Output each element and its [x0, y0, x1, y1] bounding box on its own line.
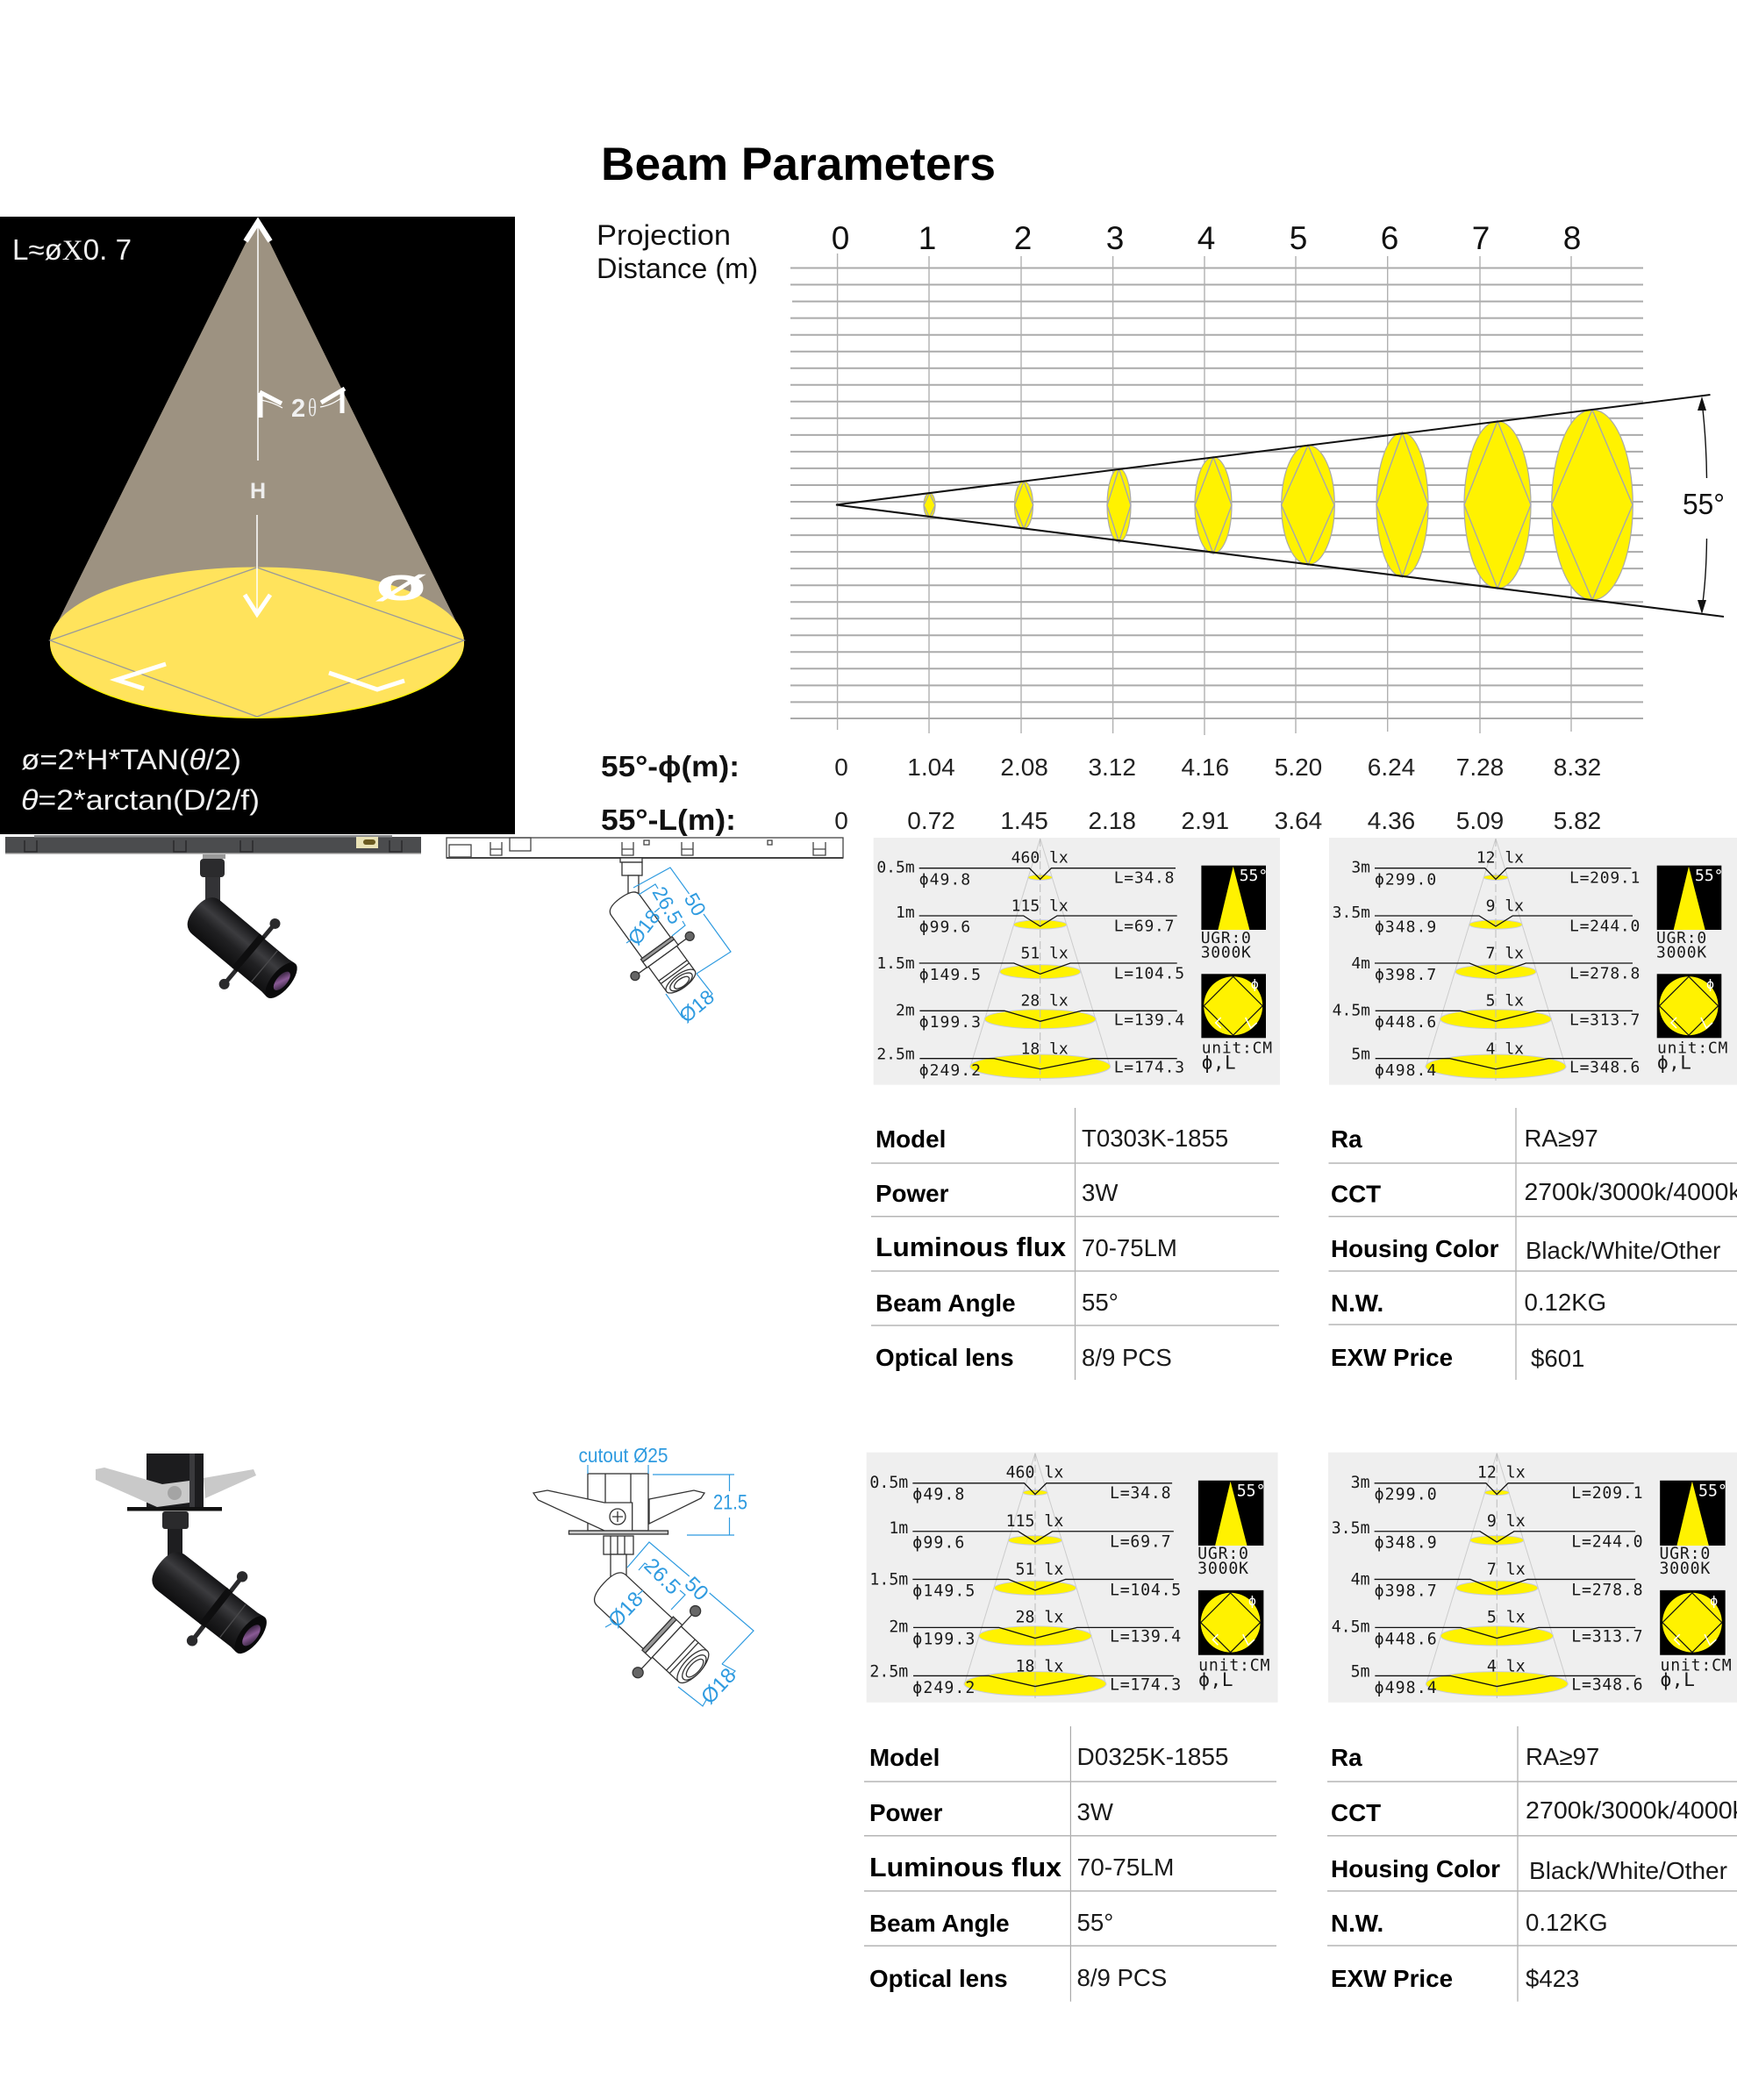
- readings: 1m: [889, 1519, 908, 1538]
- readings: ϕ99.6: [912, 1534, 965, 1553]
- distance numbers: 7: [1472, 220, 1490, 256]
- dimension: 26.5: 26.5: [640, 1554, 685, 1599]
- text: units: unit:CM: [1202, 1039, 1273, 1058]
- row labels: CCT: [1331, 1799, 1381, 1826]
- readings: ϕ149.5: [912, 1582, 976, 1601]
- distance numbers: 6: [1381, 220, 1398, 256]
- flange and stem: [127, 1507, 222, 1557]
- readings: ϕ299.0: [1375, 870, 1437, 889]
- row labels: [1331, 1744, 1500, 1992]
- readings: L=348.6: [1571, 1676, 1643, 1695]
- spread cone: [964, 1454, 1106, 1685]
- readings: 9 lx: [1486, 896, 1524, 915]
- distance numbers: 0: [832, 220, 849, 256]
- readings: 18 lx: [1016, 1657, 1063, 1675]
- row labels: [1331, 1125, 1499, 1371]
- readings: 1m: [896, 904, 915, 922]
- readings: L=174.3: [1114, 1059, 1185, 1077]
- beam spots and levels: [1375, 839, 1633, 1081]
- row values: 2700k/3000k/4000k: [1526, 1796, 1737, 1824]
- readings: 3.5m: [1333, 904, 1370, 922]
- readings: 4m: [1351, 1570, 1370, 1589]
- chart: beam projection grid: [790, 220, 1725, 735]
- text: units: [1198, 1656, 1270, 1691]
- readings: ϕ498.4: [1375, 1061, 1437, 1080]
- row: diameter values: 8.32: [1554, 754, 1601, 781]
- beam data panel: 0.5m to 2.5m, model T0303K: [874, 838, 1280, 1085]
- readings: 5 lx: [1486, 992, 1524, 1011]
- text: units: ϕ,L: [1202, 1052, 1236, 1073]
- product photo: track spotlight: [5, 835, 421, 1021]
- readings: ϕ299.0: [1375, 1486, 1438, 1504]
- row: side length values: 2.18: [1088, 807, 1136, 834]
- readings: ϕ249.2: [919, 1061, 982, 1080]
- text: units: [1660, 1656, 1733, 1691]
- readings: L=139.4: [1110, 1628, 1182, 1646]
- readings: 4 lx: [1486, 1040, 1524, 1059]
- icon: spot shape: [1198, 1590, 1263, 1655]
- readings: 4.5m: [1333, 1001, 1370, 1019]
- readings: ϕ448.6: [1375, 1630, 1438, 1648]
- text: glare and CCT: 3000K: [1659, 1560, 1711, 1578]
- label: diameter symbol: ø: [375, 558, 426, 611]
- readings: 3.5m: [1332, 1519, 1370, 1538]
- row: diameter values: 5.20: [1275, 754, 1322, 781]
- distance numbers: 1: [919, 220, 936, 256]
- readings: 2m: [889, 1618, 908, 1636]
- readings: L=34.8: [1114, 869, 1175, 888]
- panel: beam cone formula diagram: [0, 217, 515, 834]
- text: glare and CCT: [1659, 1545, 1711, 1578]
- row labels: Ra: [1331, 1125, 1362, 1153]
- row: diameter values: 0: [834, 754, 848, 781]
- technical drawing: recessed spotlight: [533, 1444, 754, 1709]
- row: side length values: 0.72: [907, 807, 955, 834]
- row values: RA≥97: [1526, 1743, 1599, 1770]
- readings: 51 lx: [1016, 1561, 1063, 1579]
- row labels: Housing Color: [1331, 1235, 1499, 1262]
- icon: beam angle: [1201, 866, 1268, 930]
- readings: 51 lx: [1021, 945, 1069, 963]
- icon: spot shape: ϕ: [1706, 976, 1714, 992]
- readings: L=313.7: [1571, 1628, 1643, 1646]
- readings: L=104.5: [1114, 965, 1185, 983]
- row: side length values: 1.45: [1000, 807, 1048, 834]
- readings: 2.5m: [876, 1046, 915, 1064]
- angle label: 2 theta: θ: [308, 395, 317, 422]
- readings: 7 lx: [1486, 945, 1524, 963]
- axis label: projection distance: Distance (m): [597, 253, 758, 284]
- readings: 115 lx: [1011, 896, 1069, 915]
- label: L marks: [117, 664, 404, 689]
- readings: ϕ149.5: [919, 966, 982, 984]
- label: H: H: [250, 479, 266, 504]
- row: side length values: 4.36: [1368, 807, 1415, 834]
- text: glare and CCT: 3000K: [1656, 944, 1707, 962]
- readings: 5m: [1351, 1046, 1370, 1064]
- icon: spot shape: ϕ: [1251, 976, 1259, 992]
- readings: [876, 848, 1185, 1080]
- row values: [1525, 1125, 1737, 1372]
- dimension: 26.5: 26.5: [648, 882, 687, 928]
- row values: 55°: [1077, 1909, 1113, 1936]
- readings: L=244.0: [1569, 918, 1640, 936]
- row: diameter values: 3.12: [1088, 754, 1136, 781]
- row labels: Optical lens: [876, 1344, 1014, 1371]
- row labels: [876, 1125, 1067, 1371]
- readings: L=348.6: [1569, 1059, 1640, 1077]
- row values: 3W: [1082, 1179, 1118, 1206]
- axis label: projection distance: Projection: [597, 219, 731, 251]
- readings: ϕ398.7: [1375, 1582, 1438, 1601]
- text: glare and CCT: [1197, 1545, 1249, 1578]
- row labels: N.W.: [1331, 1289, 1383, 1317]
- track outline: [447, 838, 843, 858]
- beam data panel: 3m to 5m, model D0325K: [1328, 1453, 1737, 1703]
- row: diameter values: 55°-ϕ(m):: [601, 750, 740, 782]
- readings: ϕ199.3: [919, 1013, 982, 1032]
- icon: spot shape: ϕ: [1710, 1593, 1718, 1609]
- beam spots and levels: [919, 839, 1177, 1081]
- readings: ϕ448.6: [1375, 1013, 1437, 1032]
- dimension: 50: 50: [680, 889, 711, 920]
- row values: Black/White/Other: [1526, 1237, 1720, 1264]
- readings: ϕ348.9: [1375, 1534, 1438, 1553]
- row: side length values: 2.91: [1182, 807, 1229, 834]
- lamp body: [131, 1527, 287, 1677]
- readings: ϕ99.6: [919, 918, 971, 937]
- row: diameter values: 7.28: [1456, 754, 1504, 781]
- distance numbers: 2: [1014, 220, 1032, 256]
- icon: beam angle: 55°: [1240, 867, 1268, 885]
- row labels: Luminous flux: [876, 1232, 1067, 1262]
- dimension: height 21.5: 21.5: [713, 1491, 747, 1514]
- dimension: front diameter 18: [666, 974, 718, 1027]
- readings: 7 lx: [1487, 1561, 1526, 1579]
- readings: 5m: [1351, 1662, 1370, 1681]
- distance numbers: 3: [1106, 220, 1124, 256]
- readings: 3m: [1351, 1474, 1370, 1492]
- icon: beam angle: 55°: [1698, 1482, 1727, 1500]
- beam spots and levels: [1375, 1454, 1635, 1698]
- readings: 4 lx: [1487, 1657, 1526, 1675]
- row labels: EXW Price: [1331, 1965, 1453, 1992]
- row: side length values: [601, 804, 1601, 836]
- text: units: [1202, 1039, 1273, 1073]
- row: side length values: 55°-L(m):: [601, 804, 736, 836]
- readings: 2.5m: [869, 1662, 908, 1681]
- row values: 70-75LM: [1082, 1234, 1177, 1261]
- distance numbers: 8: [1563, 220, 1581, 256]
- readings: L=69.7: [1114, 918, 1175, 936]
- row labels: Model: [876, 1125, 946, 1153]
- row: diameter values: 2.08: [1000, 754, 1048, 781]
- spread cone: [1426, 839, 1566, 1068]
- row values: $601: [1531, 1345, 1584, 1372]
- readings: 1.5m: [876, 954, 915, 973]
- row values: 8/9 PCS: [1077, 1964, 1167, 1991]
- text: glare and CCT: [1201, 929, 1252, 962]
- row labels: Luminous flux: [869, 1852, 1062, 1882]
- row labels: Power: [869, 1799, 943, 1826]
- readings: ϕ199.3: [912, 1630, 976, 1648]
- readings: 12 lx: [1477, 1463, 1526, 1482]
- readings: 2m: [896, 1001, 915, 1019]
- beam edges: [836, 395, 1724, 617]
- icon: spot shape: ϕ: [1248, 1593, 1256, 1609]
- beam data panel: 0.5m to 2.5m, model D0325K: [867, 1453, 1278, 1703]
- readings: 460 lx: [1011, 848, 1069, 867]
- icon: spot shape: [1201, 974, 1266, 1038]
- readings: 3m: [1351, 859, 1370, 877]
- angle dimension: 55 degrees: 55°: [1683, 488, 1725, 520]
- product photo: recessed spotlight: [96, 1454, 287, 1677]
- readings: ϕ249.2: [912, 1679, 976, 1697]
- angle dimension: 55 degrees: [1683, 396, 1725, 614]
- grid horizontal lines: [790, 268, 1643, 718]
- row values: 3W: [1077, 1798, 1113, 1825]
- row: diameter values: 1.04: [907, 754, 955, 781]
- row values: 8/9 PCS: [1082, 1344, 1172, 1371]
- text: units: unit:CM: [1198, 1656, 1270, 1675]
- icon: beam angle: [1198, 1481, 1266, 1546]
- readings: L=209.1: [1571, 1484, 1643, 1503]
- text: glare and CCT: 3000K: [1201, 944, 1252, 962]
- readings: [1332, 1463, 1643, 1697]
- spec table: D0325K left: [864, 1726, 1276, 2002]
- readings: L=69.7: [1110, 1533, 1171, 1552]
- icon: beam angle: 55°: [1695, 867, 1724, 885]
- row values: Black/White/Other: [1529, 1857, 1727, 1884]
- formula: L approx: L≈øX0. 7: [12, 233, 132, 267]
- row values: D0325K-1855: [1077, 1743, 1228, 1770]
- text: units: ϕ,L: [1660, 1669, 1695, 1691]
- text: units: ϕ,L: [1198, 1669, 1233, 1691]
- icon: spot shape: [1657, 974, 1721, 1038]
- beam spots: [924, 410, 1633, 600]
- row values: [1526, 1743, 1737, 1992]
- readings: 5 lx: [1487, 1609, 1526, 1627]
- stem: [200, 854, 225, 904]
- lamp body: [167, 874, 318, 1021]
- readings: L=278.8: [1569, 965, 1640, 983]
- dimension: height 21.5: [588, 1465, 747, 1535]
- readings: 0.5m: [876, 859, 915, 877]
- row values: T0303K-1855: [1082, 1125, 1228, 1152]
- title: Beam Parameters: [601, 139, 996, 190]
- row values: 0.12KG: [1526, 1909, 1608, 1936]
- outline lamp: [571, 1548, 732, 1707]
- row labels: Ra: [1331, 1744, 1362, 1771]
- row labels: CCT: [1331, 1181, 1381, 1207]
- dimension: front diameter 18: Ø18: [675, 985, 718, 1027]
- readings: ϕ49.8: [919, 870, 971, 889]
- spec table: T0303K left: [871, 1108, 1279, 1380]
- text: glare and CCT: [1656, 929, 1707, 962]
- row values: RA≥97: [1525, 1125, 1598, 1152]
- dimension: front diameter 18: Ø18: [697, 1664, 741, 1709]
- readings: [1333, 848, 1640, 1080]
- outline stem: [620, 858, 642, 896]
- row: diameter values: 6.24: [1368, 754, 1415, 781]
- spec table: T0303K right: [1328, 1108, 1737, 1380]
- text: glare and CCT: 3000K: [1197, 1560, 1249, 1578]
- text: units: unit:CM: [1657, 1039, 1728, 1058]
- grid vertical lines: [838, 254, 1571, 735]
- arrow: height axis: [245, 221, 270, 614]
- dimension: 50: [633, 868, 731, 974]
- dimension: body diameter 18: Ø18: [623, 905, 665, 949]
- readings: 12 lx: [1476, 848, 1524, 867]
- dimension: body diameter 18: Ø18: [604, 1588, 648, 1632]
- row labels: Model: [869, 1744, 940, 1771]
- text: glare and CCT: UGR:0: [1201, 929, 1252, 947]
- row labels: Optical lens: [869, 1965, 1008, 1992]
- readings: L=34.8: [1110, 1484, 1171, 1503]
- readings: [869, 1463, 1182, 1697]
- text: glare and CCT: UGR:0: [1656, 929, 1707, 947]
- formula: angle: θ=2*arctan(D/2/f): [21, 784, 260, 816]
- row labels: [869, 1744, 1062, 1992]
- readings: ϕ398.7: [1375, 966, 1437, 984]
- spec table: D0325K right: [1327, 1726, 1737, 2002]
- readings: L=244.0: [1571, 1533, 1643, 1552]
- distance numbers: 5: [1290, 220, 1307, 256]
- row values: 55°: [1082, 1289, 1119, 1316]
- row: side length values: 3.64: [1275, 807, 1322, 834]
- text: units: ϕ,L: [1657, 1052, 1691, 1073]
- row: diameter values: 4.16: [1182, 754, 1229, 781]
- readings: 115 lx: [1006, 1512, 1063, 1531]
- readings: 28 lx: [1016, 1609, 1063, 1627]
- text: glare and CCT: UGR:0: [1197, 1545, 1249, 1563]
- readings: L=313.7: [1569, 1011, 1640, 1029]
- dimension: 26.5: [639, 882, 687, 936]
- readings: 1.5m: [869, 1570, 908, 1589]
- spread cone: [970, 839, 1111, 1068]
- readings: 28 lx: [1021, 992, 1069, 1011]
- row values: [1082, 1125, 1228, 1371]
- technical drawing: track spotlight: [447, 838, 843, 1027]
- text: units: [1657, 1039, 1728, 1073]
- row values: 70-75LM: [1077, 1854, 1174, 1881]
- readings: 4.5m: [1332, 1618, 1370, 1636]
- dimension: 50: [627, 1542, 754, 1664]
- icon: spot shape: [1660, 1590, 1726, 1655]
- outline lamp: [590, 875, 716, 1010]
- icon: beam angle: [1657, 866, 1724, 930]
- icon: beam angle: 55°: [1237, 1482, 1266, 1500]
- icon: beam angle: [1660, 1481, 1727, 1546]
- readings: ϕ498.4: [1375, 1679, 1438, 1697]
- readings: L=104.5: [1110, 1581, 1182, 1599]
- spread cone: [1426, 1454, 1568, 1685]
- readings: 460 lx: [1006, 1463, 1063, 1482]
- readings: L=139.4: [1114, 1011, 1185, 1029]
- angle label: 2 theta: [260, 389, 345, 423]
- row labels: N.W.: [1331, 1910, 1383, 1937]
- distance numbers: [832, 220, 1581, 256]
- readings: 0.5m: [869, 1474, 908, 1492]
- text: glare and CCT: UGR:0: [1659, 1545, 1711, 1563]
- row values: [1077, 1743, 1228, 1991]
- readings: 18 lx: [1021, 1040, 1069, 1059]
- readings: L=278.8: [1571, 1581, 1643, 1599]
- row labels: Housing Color: [1331, 1855, 1500, 1882]
- housing outline: [533, 1474, 704, 1584]
- formula: diameter: ø=2*H*TAN( θ/2): [21, 744, 241, 775]
- row labels: Beam Angle: [876, 1289, 1016, 1317]
- angle label: 2 theta: 2: [291, 395, 305, 423]
- track rail: [5, 835, 421, 854]
- row: side length values: 5.09: [1456, 807, 1504, 834]
- row values: 0.12KG: [1525, 1289, 1606, 1316]
- spring clips: [96, 1468, 256, 1507]
- row: side length values: 0: [834, 807, 848, 834]
- readings: ϕ49.8: [912, 1486, 965, 1504]
- text: units: unit:CM: [1660, 1656, 1733, 1675]
- lit ellipse: [50, 567, 464, 718]
- readings: L=174.3: [1110, 1676, 1182, 1695]
- label: cutout: cutout Ø25: [579, 1444, 668, 1467]
- row values: $423: [1526, 1965, 1579, 1992]
- readings: 4m: [1351, 954, 1370, 973]
- row labels: Beam Angle: [869, 1910, 1010, 1937]
- dimension: 50: 50: [680, 1572, 713, 1605]
- housing: [147, 1454, 204, 1507]
- beam spots and levels: [912, 1454, 1174, 1698]
- row: side length values: 5.82: [1554, 807, 1601, 834]
- axis label: projection distance: [597, 219, 758, 284]
- beam data panel: 3m to 5m, model T0303K: [1329, 838, 1737, 1085]
- row labels: Power: [876, 1180, 949, 1207]
- row labels: EXW Price: [1331, 1344, 1453, 1371]
- readings: L=209.1: [1569, 869, 1640, 888]
- row: diameter values: [601, 750, 1601, 782]
- readings: 9 lx: [1487, 1512, 1526, 1531]
- distance numbers: 4: [1197, 220, 1215, 256]
- row values: 2700k/3000k/4000k: [1525, 1178, 1737, 1205]
- readings: ϕ348.9: [1375, 918, 1437, 937]
- light cone: [50, 218, 464, 638]
